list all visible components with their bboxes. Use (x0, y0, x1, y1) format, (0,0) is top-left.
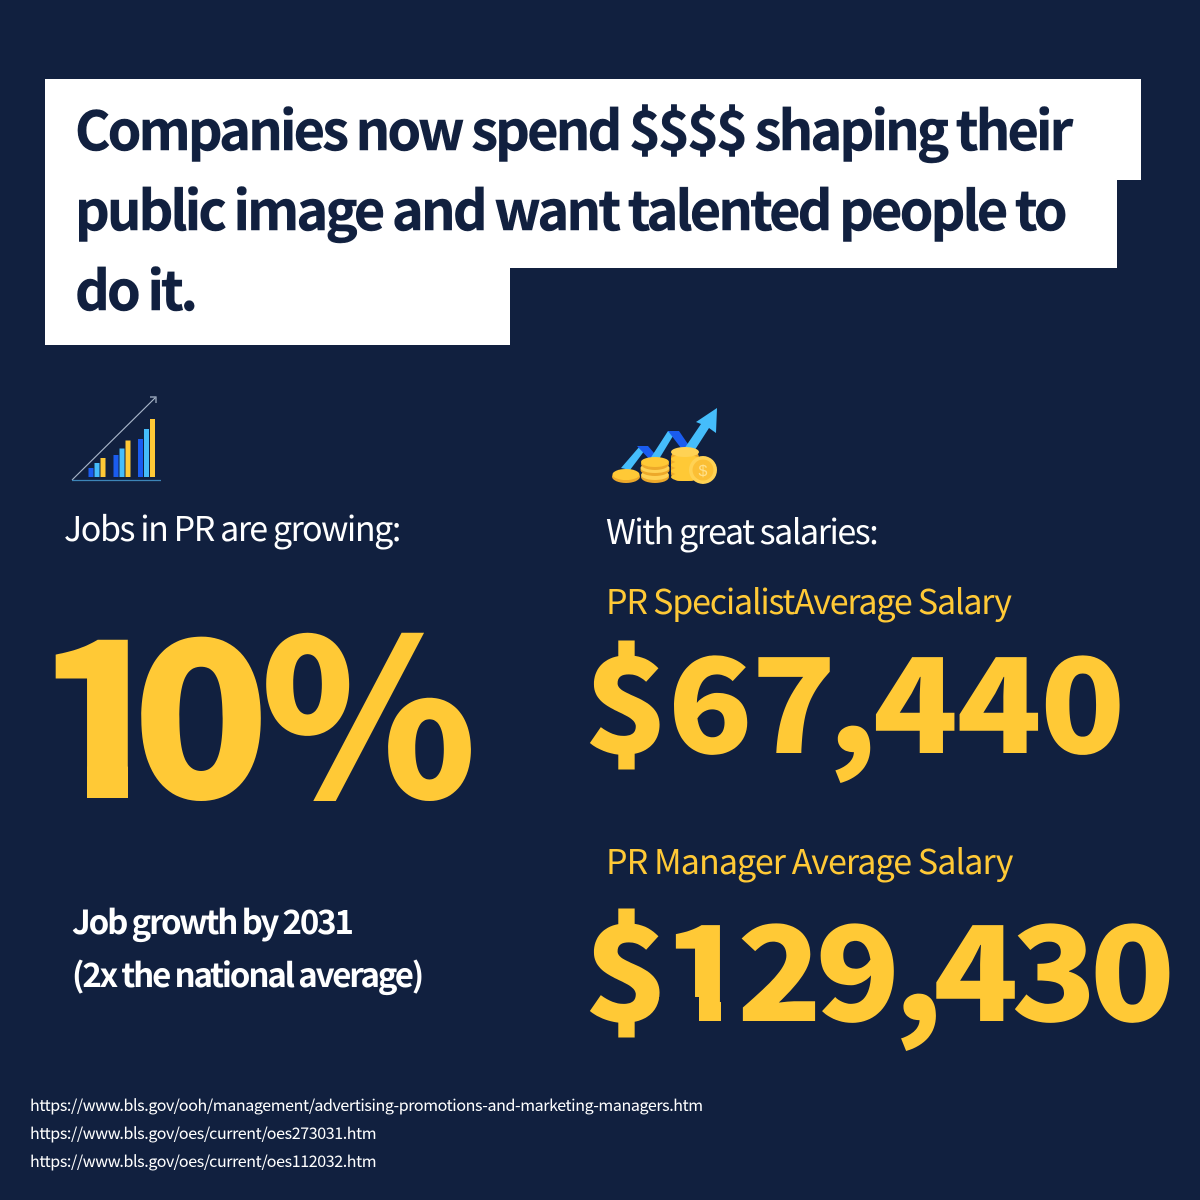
big stat: manager salary: 1 (662, 869, 747, 1060)
panel: job growth (33, 396, 477, 997)
big stat: manager salary: $ (584, 869, 669, 1060)
big stat: 10 percent: % (260, 545, 477, 861)
heading: jobs growing: Jobs in PR are growing: (64, 502, 400, 551)
panel: salaries (584, 408, 1170, 1060)
note: job growth: Job growth by 2031 (72, 896, 352, 944)
title text (75, 87, 1074, 326)
banner background (45, 79, 1141, 345)
note: job growth: (2x the national average) (72, 949, 422, 997)
sources: https://www.bls.gov/ooh/management/advertising-promotions-and-marketing-managers.htm (30, 1092, 703, 1116)
title banner (45, 79, 1141, 345)
sources: https://www.bls.gov/oes/current/oes112032.htm (30, 1148, 376, 1172)
big stat: specialist salary: $67,440 (584, 601, 1124, 792)
title text: do it. (75, 247, 195, 326)
icon: rising bar chart (72, 396, 161, 482)
sources: https://www.bls.gov/oes/current/oes273031.htm (30, 1120, 376, 1144)
big stat: 10 percent (33, 545, 477, 861)
heading: great salaries: With great salaries: (606, 505, 877, 554)
big stat: manager salary: 29,430 (737, 869, 1168, 1060)
title text: Companies now spend $$$$ shaping their (75, 87, 1070, 166)
sources (30, 1092, 703, 1172)
note: job growth (72, 896, 422, 997)
label: specialist salary: PR SpecialistAverage Salary (606, 575, 1011, 624)
big stat: 10 percent: 1 (33, 545, 172, 861)
label: manager salary: PR Manager Average Salary (606, 835, 1013, 884)
title text: public image and want talented people to (75, 167, 1065, 246)
icon: coins and rising arrow: $ (699, 463, 708, 480)
icon: coins and rising arrow (612, 408, 717, 484)
big stat: 10 percent: 0 (132, 545, 270, 861)
